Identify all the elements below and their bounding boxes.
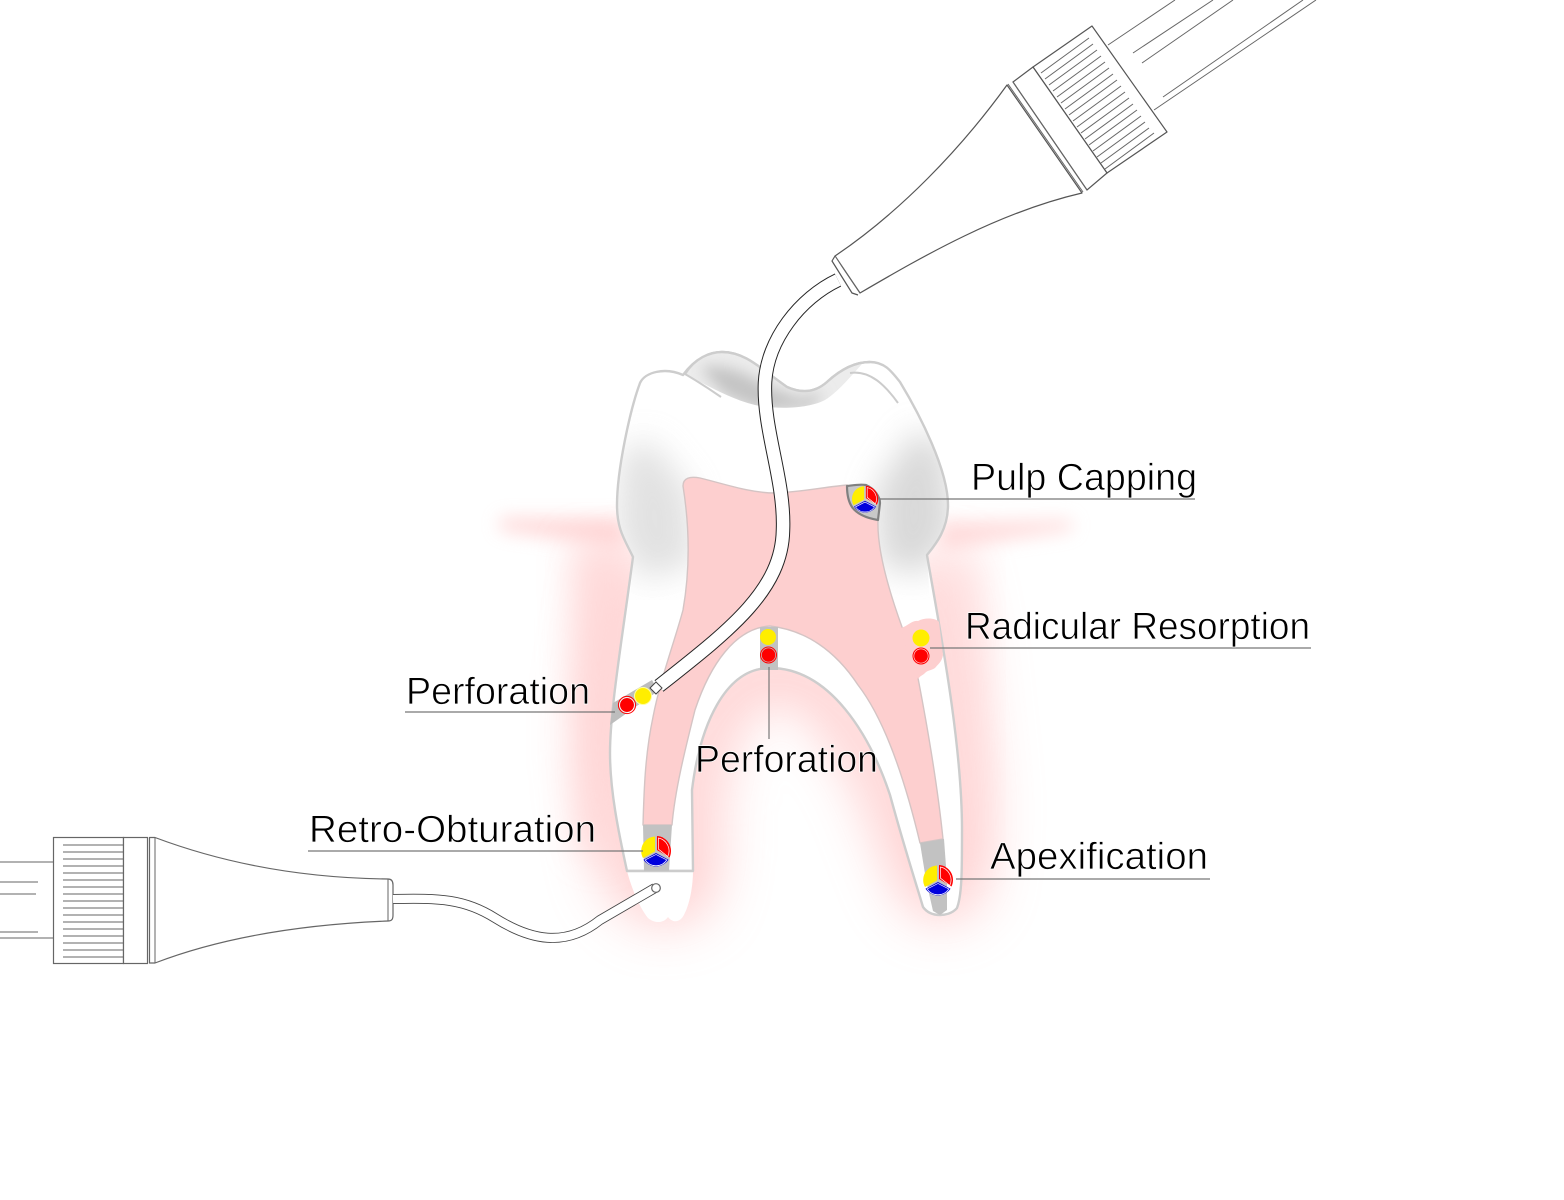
red dot bbox=[914, 649, 928, 663]
knurled ring bbox=[1033, 26, 1167, 173]
needle tip bbox=[652, 884, 660, 892]
tube bbox=[0, 862, 53, 938]
apexification repair bbox=[920, 839, 953, 915]
collar bbox=[124, 838, 148, 964]
yellow dot bbox=[760, 629, 776, 645]
knurl ribs bbox=[63, 845, 123, 957]
perforation repair: left root bbox=[610, 680, 658, 725]
tri-colour marker bbox=[641, 836, 671, 866]
tube bbox=[1108, 0, 1316, 110]
gum tissue glow bbox=[500, 518, 1072, 898]
pulp chamber and canals bbox=[643, 477, 943, 843]
knurled ring bbox=[54, 838, 124, 964]
nozzle seam bbox=[155, 838, 388, 963]
tri-colour marker bbox=[923, 865, 953, 895]
leader line bbox=[930, 647, 1311, 649]
crown shading bbox=[615, 430, 955, 580]
back cusp outline bbox=[685, 352, 870, 391]
grey repair column bbox=[760, 627, 778, 670]
needle tip bbox=[650, 682, 662, 694]
apex cut line bbox=[627, 870, 693, 872]
occlusal surface shadow bbox=[686, 354, 862, 408]
upper instrument bbox=[650, 0, 1316, 694]
label text: Apexification bbox=[990, 836, 1208, 878]
collar seam bbox=[1008, 82, 1087, 192]
leader line bbox=[308, 850, 643, 852]
leader line bbox=[405, 711, 615, 713]
leader line bbox=[956, 878, 1210, 880]
yellow dot bbox=[634, 688, 652, 704]
label text: Perforation bbox=[695, 739, 878, 781]
grey repair band bbox=[610, 680, 658, 725]
grey fill bbox=[643, 825, 672, 871]
tri-colour marker bbox=[852, 486, 878, 513]
label text: Retro-Obturation bbox=[309, 809, 596, 851]
pulp capping repair bbox=[847, 485, 880, 520]
grey cap bbox=[847, 485, 880, 520]
radicular resorption repair bbox=[912, 630, 930, 664]
grey plug bbox=[920, 839, 947, 915]
tooth crown and root outline bbox=[610, 352, 962, 915]
label text: Radicular Resorption bbox=[965, 606, 1310, 648]
leader line bbox=[768, 667, 770, 739]
resorption lesion bbox=[901, 618, 943, 679]
tooth body bbox=[610, 345, 962, 922]
root apex white tip bbox=[627, 871, 693, 922]
retro-obturation repair bbox=[641, 825, 672, 871]
leader line bbox=[880, 498, 1195, 500]
knurl ribs bbox=[1041, 38, 1154, 169]
red dot bbox=[620, 698, 634, 712]
label text: Pulp Capping bbox=[971, 457, 1197, 499]
nozzle body bbox=[150, 838, 393, 963]
label text: Perforation bbox=[406, 671, 590, 713]
nozzle end cap bbox=[832, 256, 858, 295]
front cusp ridge right bbox=[850, 373, 898, 403]
needle: file tube bbox=[659, 280, 838, 686]
lower instrument bbox=[0, 838, 660, 964]
front cusp ridge left bbox=[685, 374, 721, 397]
needle bbox=[393, 888, 655, 938]
red dot bbox=[762, 648, 775, 662]
yellow dot bbox=[912, 630, 930, 646]
nozzle body bbox=[835, 85, 1082, 293]
perforation repair: furcation bbox=[760, 627, 778, 670]
collar bbox=[1013, 67, 1107, 190]
